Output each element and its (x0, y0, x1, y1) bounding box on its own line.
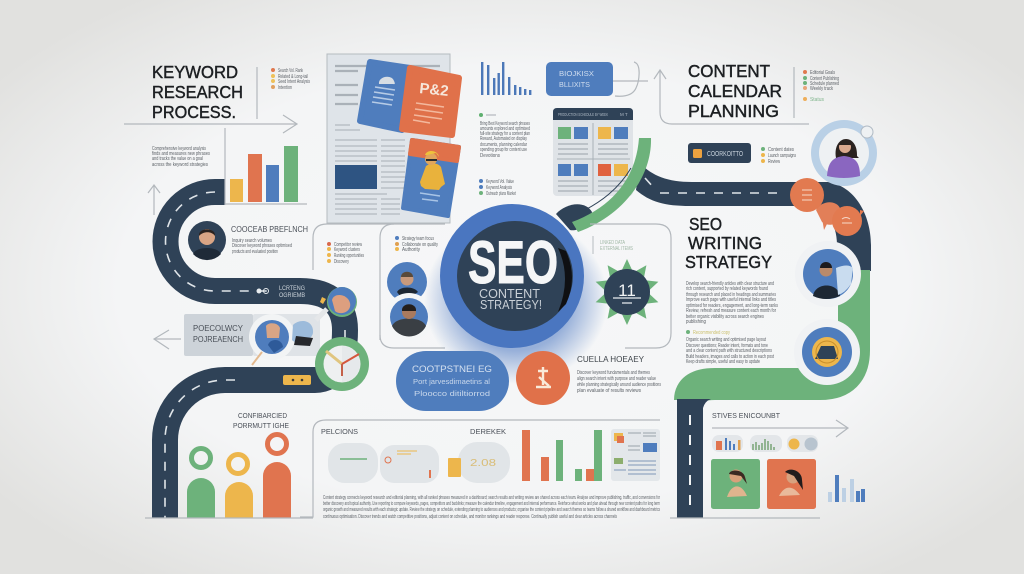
icon: clock (315, 337, 369, 391)
label: bottom left chart (233, 411, 289, 430)
text block: seo writing: better organic visibility across search engines (686, 314, 764, 320)
text block: profile (231, 225, 308, 255)
legend: calendar: Weekly track (810, 86, 833, 92)
legend: keyword: Search Vol. Rank (278, 68, 303, 74)
text block: seo writing: Review, refresh and measure content each month for (686, 308, 776, 314)
legend: calendar (803, 70, 839, 103)
text block: seo writing: rich content, supported by related keywords found (686, 286, 768, 292)
heading: content calendar planning (688, 61, 782, 121)
text block: seo writing: and a clear content path with structured descriptions (686, 348, 772, 354)
text block: summary: organic growth and measured results with each strategic update. Review the strategy on schedule, extending planning to audiences and products; organise the content pipeline and search themes so teams follow a shared workflow and dashboard metrics (323, 507, 660, 513)
text block: keyword intro: finds and measures new phrases (152, 151, 210, 157)
text block: seo writing: Develop search-friendly articles with clear structure and (686, 281, 774, 287)
icons: orange circles on road (790, 178, 864, 236)
heading: stives enicounbt with arrow (712, 411, 848, 437)
road: right winding path dark section (636, 163, 871, 271)
chart: rings and pillars (187, 434, 291, 518)
text block: profile: products and evaluated position (232, 249, 278, 255)
legend: badge: Launch campaigns (768, 153, 796, 159)
text block: summary: better discovery and topical authority. Use reporting to compare keywords, pages, competitors and backlinks; measure the calendar timeline, engagement and internal performance. Reinforce what works and plan ahead through new content paths for long term (323, 501, 660, 507)
text block: keyword intro (152, 146, 210, 168)
badge: dark label: COORKOITTO (707, 151, 743, 158)
icon: green sun with number (594, 259, 660, 325)
text block: cuella hoeaey: while planning strategically around audience positions (577, 382, 661, 388)
text block: top middle: amounts explored and optimised (480, 126, 530, 132)
legend: calendar: Content Publishing (810, 76, 839, 82)
chips: mini charts (712, 435, 818, 452)
legend: badge (761, 147, 796, 165)
icon: orange circle (516, 351, 570, 405)
text: panel right label (593, 236, 634, 254)
label: blue box: BLLIXITS (559, 80, 590, 89)
icon: hand with magnifier on road (320, 287, 357, 317)
text block: summary: Content strategy connects keyword research and editorial planning, with all ranked phrases measured in a dashboard; search results and writing review are shared across each team. Analyse and improve publishing, traffic, and conversions for (323, 495, 660, 501)
text block: top middle: Reward, Automated on display (480, 136, 527, 142)
callout: blue pill (396, 351, 509, 411)
text block: seo writing: Organic search writing and optimised page layout (686, 337, 766, 343)
avatar: person one (387, 262, 427, 302)
legend: top middle: Keyword Vol. Value (486, 179, 514, 185)
bar chart: mini histogram (481, 62, 531, 95)
text block: cuella hoeaey: plan evaluate of results reviews (577, 388, 641, 394)
avatar: man with glasses (188, 221, 226, 260)
bar chart: keyword (225, 128, 307, 205)
heading: stives enicounbt with arrow: STIVES ENICOUNBT (712, 411, 780, 420)
legend: panel people (395, 236, 438, 253)
road: left winding path: OGRIEMB (279, 293, 305, 299)
box: process label with avatars: POECOLWCY (193, 324, 244, 333)
text block: cuella hoeaey: Discover keyword fundamentals and themes (577, 370, 650, 376)
bar chart: summary (522, 430, 602, 481)
heading: content calendar planning: PLANNING (688, 101, 779, 121)
label: blue box (546, 62, 648, 96)
text block: top middle (479, 113, 530, 159)
text block: top middle: documents, planning calendar (480, 142, 527, 148)
text block: profile: COOCEAB PBEFLNCH (231, 225, 308, 234)
centre badge: seo content strategy: CONTENT (479, 286, 540, 301)
heading: keyword research process: PROCESS. (152, 102, 236, 122)
text block: cuella hoeaey (577, 355, 661, 394)
text block: top middle: spending group for content use (480, 147, 527, 153)
badge: yellow road sign (283, 375, 311, 385)
legend: panel left (327, 242, 364, 265)
mini dashboard (611, 429, 660, 481)
text block: seo writing: publishing (686, 319, 706, 325)
calendar card: M T (620, 112, 628, 117)
card: phone with yellow character (403, 140, 459, 216)
box: process label with avatars (184, 309, 327, 365)
legend: calendar: Schedule planned (810, 81, 839, 87)
heading: seo writing strategy (685, 214, 772, 272)
text block: keyword intro: across the keyword strategies (152, 162, 208, 168)
legend: top middle: Outreach plans Market (486, 191, 516, 197)
legend: panel people: Authority (402, 247, 420, 253)
centre badge: seo content strategy: SEO (468, 229, 558, 296)
avatar: woman in purple (811, 120, 877, 186)
label: blue box: BIOJKISX (559, 69, 594, 78)
legend: panel people: Strategy team focus (402, 236, 434, 242)
callout: blue pill: Port jarvesdimaetins al (413, 377, 490, 386)
text block: seo writing: optimised for readers, engagement, and long-term ranks (686, 303, 778, 309)
panel: bottom summary: PELCIONS (321, 427, 358, 436)
heading: keyword research process: KEYWORD (152, 62, 238, 82)
chart blobs: metrics (328, 442, 510, 483)
green connector to centre (556, 138, 651, 232)
road: green section into lower dark road (677, 270, 854, 518)
road: left winding path (165, 192, 345, 518)
heading: keyword research process: RESEARCH (152, 82, 243, 102)
badge: yellow compass icon (794, 319, 860, 385)
text block: top middle: full-site strategy for a content plan (480, 131, 530, 137)
text block: keyword intro: and tracks the value on a goal (152, 156, 203, 162)
label: bottom left chart: PORRMUTT IGHE (233, 421, 289, 430)
tiles: two portraits (711, 459, 816, 509)
text block: seo writing: Build headers, images and calls to action in each post (686, 354, 774, 360)
heading: keyword research process (152, 62, 243, 122)
callout: blue pill: Ploocco ditiltiorrod (414, 389, 490, 398)
calendar card (553, 108, 633, 196)
text block: profile: Discover keyword phrases optimised (232, 243, 292, 249)
heading: content calendar planning: CONTENT (688, 61, 770, 81)
text block: cuella hoeaey: align search intent with purpose and reader value (577, 376, 656, 382)
legend: calendar: Status (810, 97, 824, 103)
legend: keyword: Seed Intent Analysis (278, 79, 310, 85)
avatar: person two (385, 293, 433, 341)
heading: seo writing strategy: SEO (689, 214, 722, 234)
heading: seo writing strategy: STRATEGY (685, 252, 772, 272)
icon: green sun with number: 11 (618, 281, 636, 300)
text: panel right label: LINKED DATA (600, 240, 626, 246)
text block: seo writing: Keep drafts simple, useful and easy to update (686, 359, 760, 365)
divider and arrow under keyword heading (124, 67, 297, 133)
box: process label with avatars: POJREAENCH (193, 335, 243, 344)
text: panel right label: EXTERNAL ITEMS (600, 246, 634, 252)
chart blobs: metrics: 2.08 (470, 458, 497, 469)
text block: seo writing: Recommended copy (693, 330, 730, 336)
centre badge: seo content strategy (440, 204, 584, 348)
text block: seo writing: Discover questions; Reader intent, formats and tone (686, 343, 768, 349)
legend: keyword: Intention (278, 85, 292, 91)
text block: summary: continuous optimisation. Discover trends and watch competitive positions, adjust content on schedule, and monitor rankings and reader response. Continually publish useful and clear articles across channels (323, 514, 617, 520)
text block: top middle: Devotions (480, 153, 500, 159)
card: blue and orange folder: P&2 (419, 80, 449, 100)
legend: panel left: Keyword clusters (334, 247, 360, 253)
arrow and divider: calendar (654, 67, 809, 124)
road: left winding path: LCRTENG (279, 286, 305, 292)
text block: seo writing: through research and placed in headings and summaries (686, 292, 776, 298)
legend: panel left: Competitor review (334, 242, 362, 248)
arrow: up (148, 185, 160, 215)
arrow: left (154, 330, 181, 349)
heading: content calendar planning: CALENDAR (688, 81, 782, 101)
centre badge: seo content strategy: STRATEGY! (480, 297, 542, 312)
legend: keyword: Related & Long-tail (278, 74, 308, 80)
centre glow (424, 216, 608, 384)
label: bottom left chart: CONFIBARCIED (238, 411, 288, 420)
heading: seo writing strategy: WRITING (688, 233, 762, 253)
legend: panel people: Collaborate on quality (402, 242, 438, 248)
text block: seo writing: Improve each page with useful internal links and titles (686, 297, 776, 303)
badge: dark label (688, 143, 751, 163)
text block: keyword intro: Comprehensive keyword analysis (152, 146, 206, 152)
bar chart: bottom right (828, 475, 865, 502)
panel: bottom summary: DEREKEK (470, 427, 506, 436)
legend: calendar: Editorial Goals (810, 70, 835, 76)
legend: badge: Content dates (768, 147, 794, 153)
panel outlines: middle (313, 224, 671, 348)
text block: profile: Inquiry search volumes (232, 238, 272, 244)
legend: top middle (479, 179, 516, 197)
legend: keyword (271, 68, 310, 91)
legend: panel left: Ranking opportunities (334, 253, 364, 259)
card: blue and orange folder (360, 62, 459, 135)
legend: panel left: Discovery (334, 259, 349, 265)
text block: cuella hoeaey: CUELLA HOEAEY (577, 355, 645, 364)
avatar: man in suit (795, 241, 861, 307)
calendar card: PRODUCTION SCHEDULE BY WEEK (558, 112, 608, 117)
text block: top middle: Bring Best Keyword search phrases (480, 121, 530, 127)
text block: summary (323, 495, 660, 520)
legend: top middle: Keyword Analysis (486, 185, 512, 191)
callout: blue pill: COOTPSTNEI EG (412, 364, 492, 375)
legend: badge: Review (768, 159, 780, 165)
text block: seo writing (686, 281, 778, 365)
panel: document page (327, 54, 450, 223)
panel: bottom summary (300, 420, 660, 520)
